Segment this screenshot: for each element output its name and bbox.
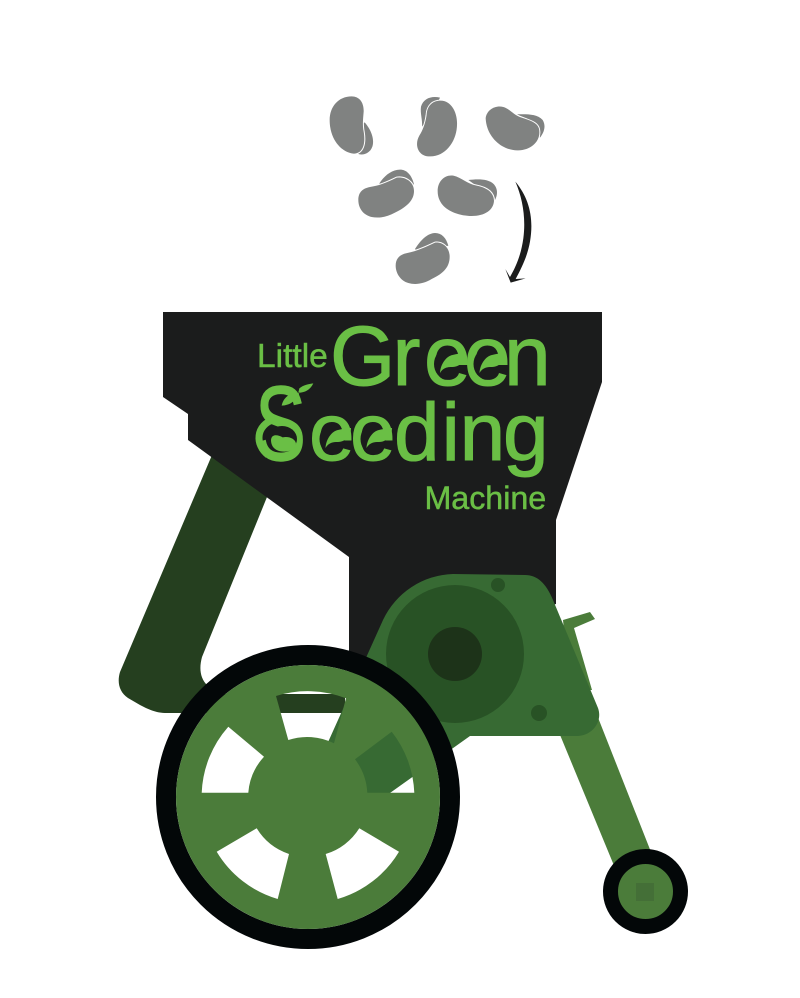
bolt bottom [531, 705, 547, 721]
small tyre [610, 856, 680, 926]
hopper body [163, 312, 602, 680]
arrow: seeds into hopper [505, 182, 531, 283]
logo [255, 309, 551, 516]
icon: sprout and seed on logo [259, 383, 313, 455]
rear lever behind gearbox [563, 612, 595, 690]
seed 2 [417, 97, 457, 156]
logo word: Seeding [255, 364, 549, 483]
seed 3 [486, 107, 544, 150]
large wheel [166, 655, 450, 939]
logo word: Machine: Machine [424, 480, 546, 516]
leaf details in the letter e shapes [320, 349, 505, 454]
support arm to small wheel [558, 715, 651, 868]
logo word: Little: Little [257, 338, 328, 375]
axle square [636, 883, 654, 901]
drive hub [428, 627, 482, 681]
logo word: Seeding: eeding [309, 387, 549, 478]
gearbox housing [320, 574, 599, 825]
small wheel [610, 856, 680, 926]
gearbox [320, 574, 599, 825]
logo word: Green: Green [330, 309, 551, 403]
drive disc [386, 585, 524, 723]
seed 1 [330, 96, 373, 155]
seed 6 [396, 233, 450, 284]
falling seeds [330, 96, 544, 284]
dark front arm [119, 455, 345, 713]
logo word: Seeding: S [255, 364, 306, 483]
seed 4 [358, 170, 414, 218]
tyre [166, 655, 450, 939]
wheel disc with spoke openings [176, 665, 440, 929]
bolt top [491, 578, 505, 592]
seed 5 [438, 175, 497, 216]
